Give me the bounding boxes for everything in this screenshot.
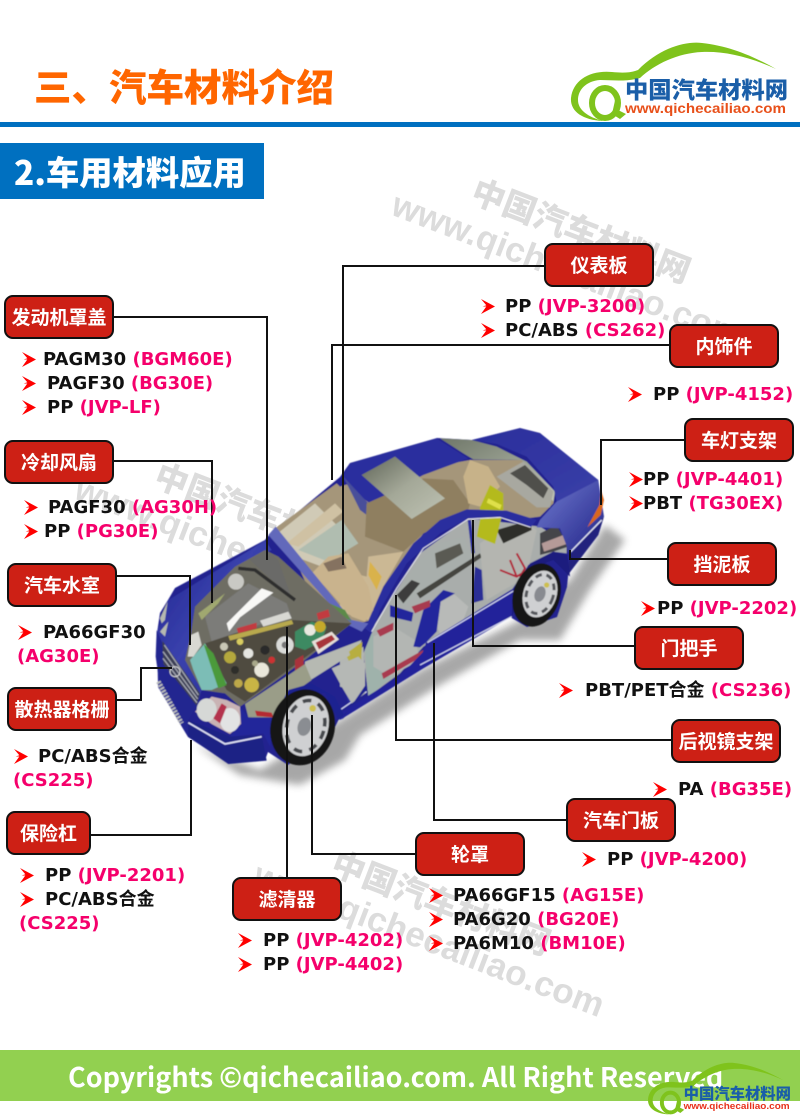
materials: 汽车门板: PP (JVP-4200) [607,849,747,870]
materials: 滤清器 [238,930,403,975]
dashboard and front seats [312,553,373,622]
label: 保险杠 [6,811,91,855]
label: 汽车水室: 汽车水室 [24,571,100,598]
grille [162,641,200,706]
trunk lid [472,428,598,502]
logo: footer: www.qichecailiao.com [683,1101,790,1111]
materials: 保险杠: PP (JVP-2201) [45,865,185,886]
materials: 保险杠 [19,865,185,934]
label: 仪表板: 仪表板 [570,251,628,278]
label: 内饰件 [669,324,779,368]
label: 车灯支架 [684,418,794,462]
label: 汽车水室 [7,563,117,607]
materials: 滤清器: PP (JVP-4202) [263,930,403,951]
rear machinery [480,523,537,600]
front wheel [262,682,343,773]
materials: 汽车水室: PA66GF30 [43,622,146,643]
materials: 车灯支架: PP (JVP-4401) [643,469,783,490]
sunroof top layer [362,457,445,519]
label: 门把手: 门把手 [660,634,718,661]
cabin interior [275,460,555,623]
label: 汽车门板 [566,798,676,842]
watermarks: 中国汽车材料网 [466,165,698,293]
firewall [250,551,292,598]
materials: 冷却风扇 [24,497,217,542]
label: 后视镜支架 [671,719,781,763]
rear quarter panel [537,480,604,555]
watermarks: www.qichecailiao.com [69,469,431,639]
materials: 汽车水室 [17,622,146,667]
materials: 轮罩 [429,885,644,954]
arch and door frame [365,509,537,633]
car shadow [195,525,625,785]
materials: 车灯支架 [629,469,783,514]
label: 发动机罩盖: 发动机罩盖 [11,303,106,330]
logo: header [570,42,788,121]
front fender [230,707,275,747]
watermarks: 中国汽车材料网 [326,837,558,965]
materials: 滤清器: PP (JVP-4402) [263,954,403,975]
engine bay [185,550,352,707]
windshield [276,503,352,567]
front half [156,503,373,773]
logo: header: 中国汽车材料网 [625,71,788,105]
materials: 仪表板 [481,296,665,341]
label: 挡泥板 [667,542,777,586]
materials: 挡泥板: PP (JVP-2202) [657,598,797,619]
label: 散热器格栅 [7,687,117,731]
rear compartment [497,462,553,507]
coolant pump [295,622,327,650]
materials: 汽车水室: (AG30E) [17,646,100,667]
rear arch [512,552,570,617]
label: 冷却风扇 [4,440,114,484]
door panels [423,593,468,633]
left marker lights [160,602,168,637]
body silhouette [157,428,603,765]
label: 滤清器 [232,877,342,921]
door sill interior [397,537,473,607]
header rule [0,122,800,127]
label: 保险杠: 保险杠 [20,819,77,846]
rear seats [365,478,470,552]
materials: 冷却风扇: PP (PG30E) [44,521,158,542]
materials: 内饰件: PP (JVP-4152) [653,384,793,405]
materials: 门把手: PBT/PET合金 (CS236) [585,680,791,701]
front seat panel [340,552,403,620]
strut tower [228,574,244,590]
label: 车灯支架: 车灯支架 [701,426,777,453]
materials: 轮罩: PA6M10 (BM10E) [453,933,626,954]
label: 滤清器: 滤清器 [258,885,316,912]
side cutaway [363,518,567,697]
rear wheel [504,557,569,633]
label: 轮罩 [415,832,525,876]
rear half [275,428,604,720]
roof [342,438,468,503]
radiator [190,643,227,690]
bay left trim [198,593,225,620]
materials: 轮罩: PA6G20 (BG20E) [453,909,619,930]
materials: 仪表板: PP (JVP-3200) [505,296,645,317]
materials: 发动机罩盖: PAGF30 (BG30E) [47,373,213,394]
engine block [205,620,352,702]
materials: 发动机罩盖: PP (JVP-LF) [47,397,161,418]
label: 门把手 [634,626,744,670]
materials: 散热器格栅: PC/ABS合金 [38,746,148,767]
lower bumper [188,720,267,764]
materials: 发动机罩盖 [22,349,233,418]
hood [157,541,272,707]
red bars [377,600,430,679]
section heading: 2.车用材料应用 [14,146,246,195]
watermarks: www.qichecailiao.com [386,185,748,355]
label: 内饰件: 内饰件 [695,332,752,359]
materials: 仪表板: PC/ABS (CS262) [505,320,665,341]
label: 散热器格栅: 散热器格栅 [14,695,110,722]
materials: 车灯支架: PBT (TG30EX) [643,493,783,514]
label: 仪表板 [544,243,654,287]
materials: 散热器格栅: (CS225) [13,770,94,791]
label: 后视镜支架: 后视镜支架 [678,727,774,754]
door mirror [390,605,413,622]
watermarks: www.qichecailiao.com [248,855,610,1025]
label: 发动机罩盖 [4,295,114,339]
red wires [500,553,525,577]
materials: 轮罩: PA66GF15 (AG15E) [453,885,644,906]
label: 轮罩: 轮罩 [451,840,489,867]
logo: footer [648,1062,791,1114]
footer band [0,1050,800,1101]
headlight [195,697,242,734]
materials: 后视镜支架: PA (BG35E) [678,779,792,800]
tail light [587,490,604,527]
firewall edge [268,527,368,632]
materials: 保险杠: PC/ABS合金 [45,889,155,910]
car [156,428,604,773]
watermarks: 中国汽车材料网 [149,449,381,577]
footer copyright: Copyrights ©qichecailiao.com. All Right Reserved [68,1056,723,1095]
materials: 发动机罩盖: PAGM30 (BGM60E) [43,349,233,370]
title: 三、汽车材料介绍 [34,57,334,112]
label: 冷却风扇: 冷却风扇 [21,448,97,475]
sunroof [362,457,445,519]
logo: header: www.qichecailiao.com [624,100,786,116]
label: 汽车门板: 汽车门板 [583,806,659,833]
sill [340,588,517,720]
front fascia [156,630,197,737]
logo: footer: 中国汽车材料网 [684,1082,791,1104]
materials: 冷却风扇: PAGF30 (AG30H) [48,497,217,518]
engine cover [205,583,292,642]
fender strip [304,640,362,679]
rear window [440,438,555,502]
materials: 散热器格栅 [13,746,148,791]
label: 挡泥板: 挡泥板 [693,550,750,577]
inner wheel arch engine parts [245,664,312,717]
yellow bracket [477,485,503,544]
front post [365,633,400,697]
materials: 保险杠: (CS225) [19,913,100,934]
blue door frame [413,590,455,647]
battery [312,632,339,654]
